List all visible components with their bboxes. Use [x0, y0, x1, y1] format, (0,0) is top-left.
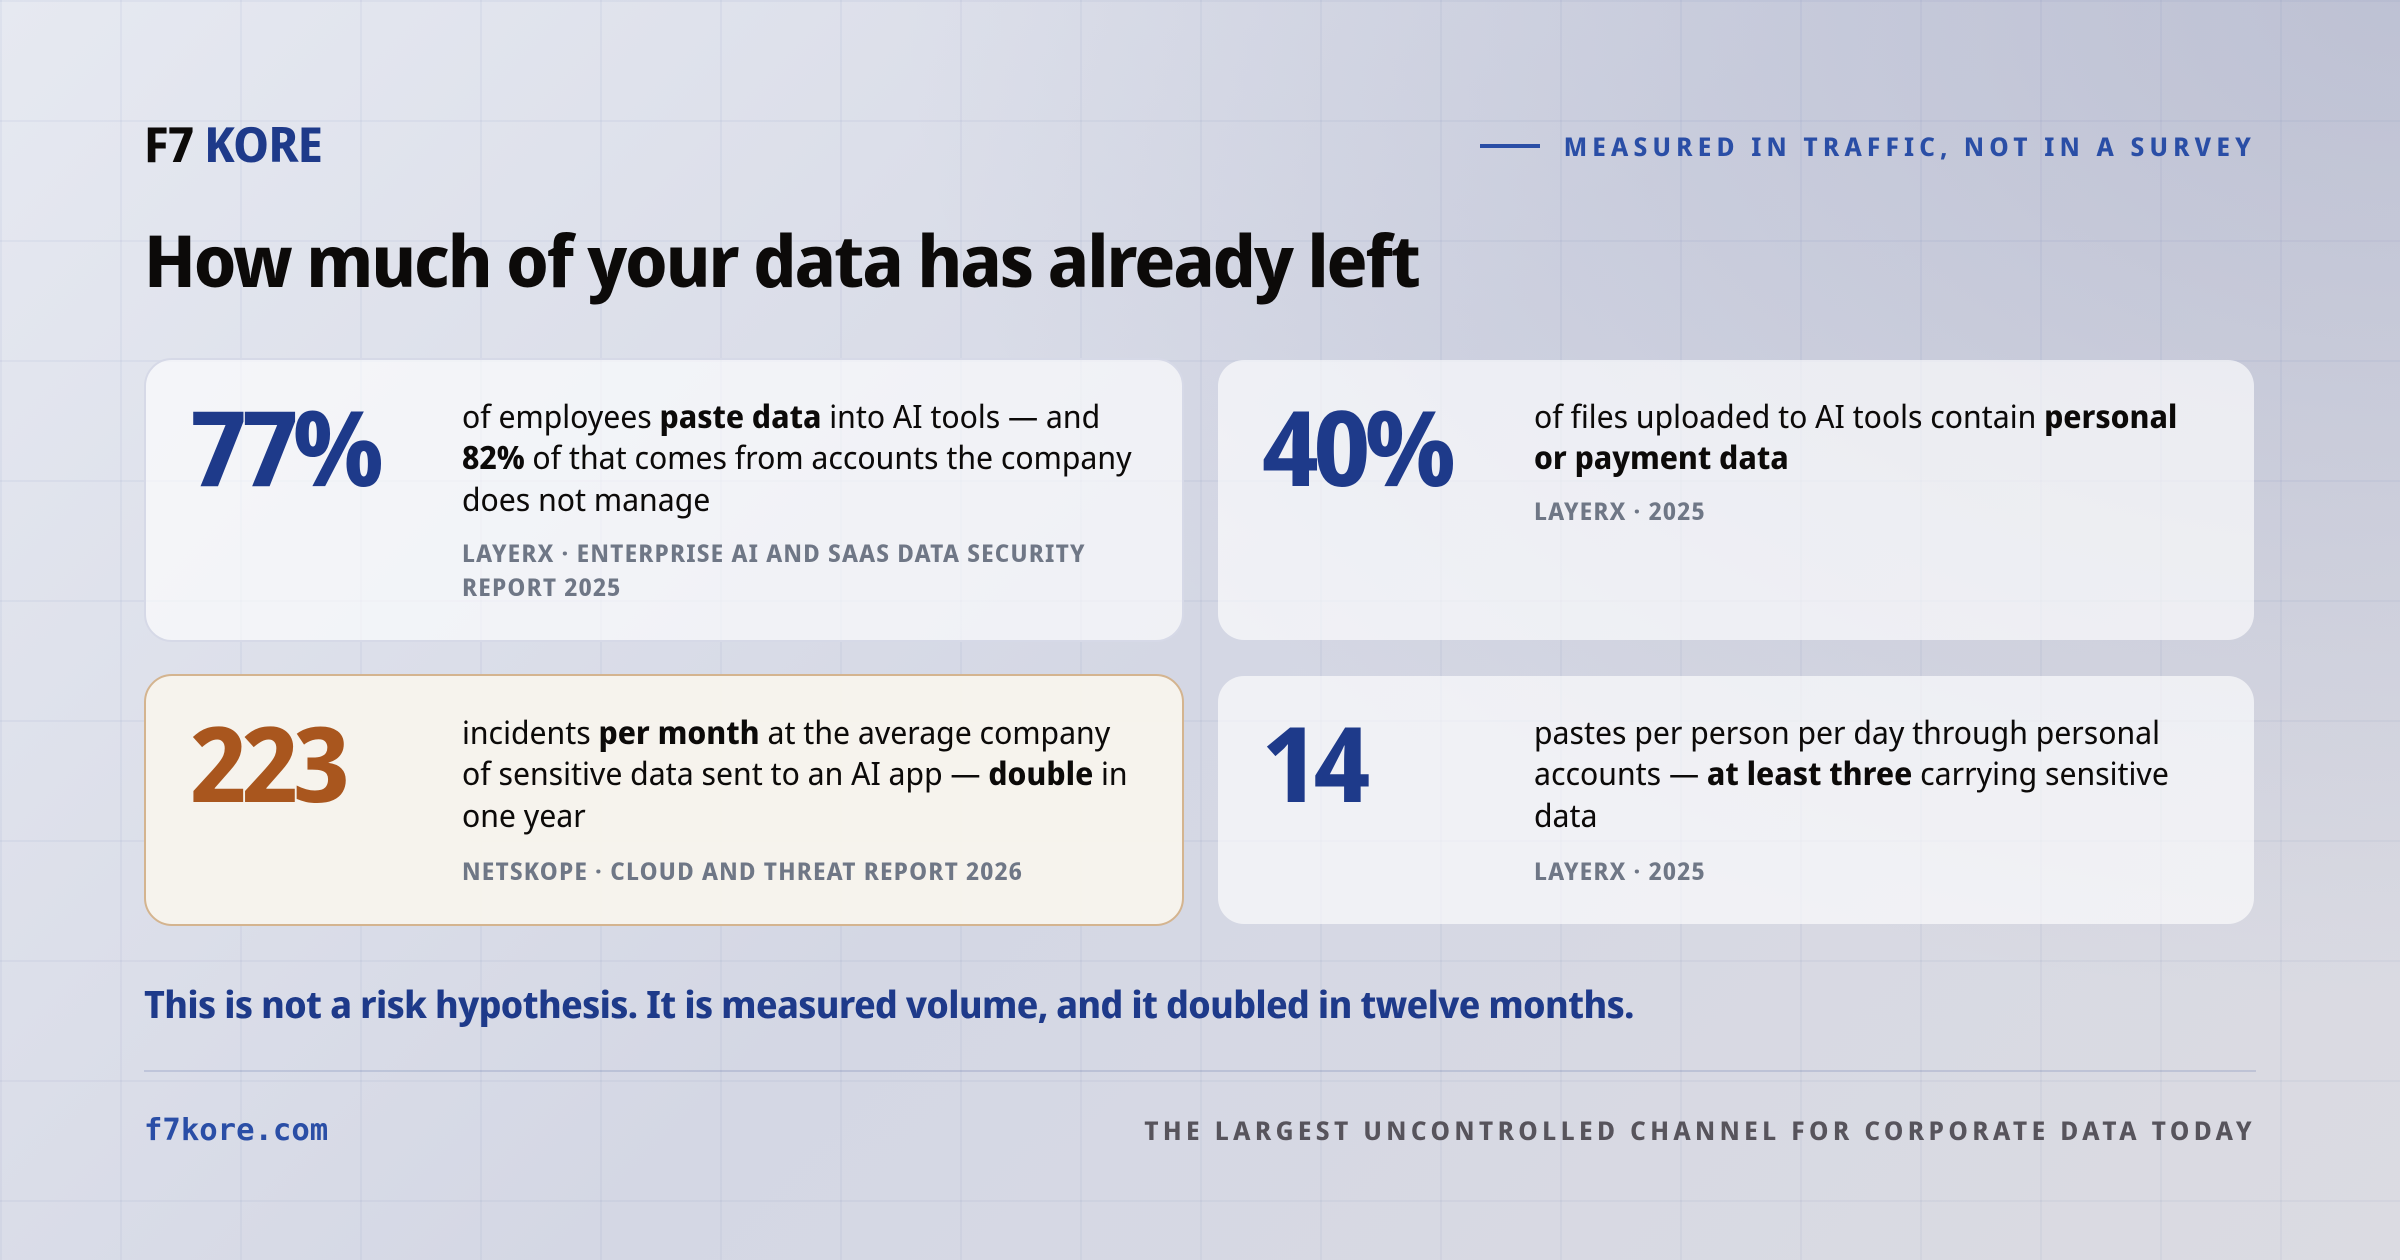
stat number 40%: 40% [1262, 376, 1451, 517]
takeaway statement: This is not a risk hypothesis. It is measured volume, and it doubled in twelve months. [144, 978, 1634, 1030]
card text: incidents per month at the average company [462, 711, 1110, 754]
stat number 77%: 77% [190, 376, 379, 517]
source: REPORT 2025 [462, 571, 621, 604]
stat number 14: 14 [1262, 692, 1365, 833]
source: LAYERX · ENTERPRISE AI AND SAAS DATA SECURITY [462, 537, 1086, 570]
card: 14 [1216, 674, 2256, 926]
tagline: measured in traffic: MEASURED IN TRAFFIC, NOT IN A SURVEY [1564, 128, 2256, 164]
card text [1534, 711, 2169, 837]
card text: of sensitive data sent to an AI app — double in [462, 752, 1128, 795]
card text: of employees paste data into AI tools — and [462, 395, 1100, 438]
stat number 223: 223 [190, 692, 345, 833]
source: LAYERX · 2025 [1534, 495, 1706, 528]
source: LAYERX · 2025 [1534, 855, 1706, 888]
card: 77% [144, 358, 1184, 642]
card text: of files uploaded to AI tools contain personal [1534, 395, 2177, 438]
card text [462, 395, 1132, 521]
card text: pastes per person per day through personal [1534, 711, 2160, 754]
card: 223 highlighted [144, 674, 1184, 926]
footer url: f7kore.com [144, 1113, 328, 1148]
logo: F7 KORE [144, 112, 322, 177]
card text: accounts — at least three carrying sensitive [1534, 752, 2169, 795]
card: 40% [1216, 358, 2256, 642]
card text: one year [462, 794, 586, 837]
card text: 82% of that comes from accounts the company [462, 436, 1132, 479]
card text [1534, 395, 2177, 479]
title: How much of your data has already left [144, 211, 1419, 309]
source [462, 537, 1086, 604]
card text: does not manage [462, 478, 710, 521]
footer tagline: THE LARGEST UNCONTROLLED CHANNEL FOR CORPORATE DATA TODAY [1144, 1112, 2256, 1148]
source: NETSKOPE · CLOUD AND THREAT REPORT 2026 [462, 855, 1023, 888]
card text: data [1534, 794, 1598, 837]
card text: or payment data [1534, 436, 1789, 479]
card text [462, 711, 1128, 837]
